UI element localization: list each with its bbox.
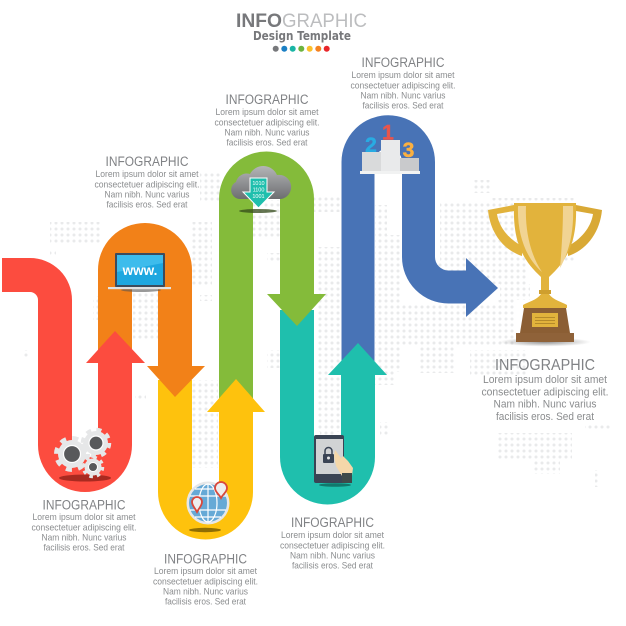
heading: INFOGRAPHIC — [106, 154, 189, 169]
body copy: consectetuer adipiscing elit. — [280, 539, 385, 550]
icon: cloud download: 1010 — [252, 181, 265, 187]
heading: INFOGRAPHIC — [495, 357, 595, 374]
body copy: Lorem ipsum dolor sit amet — [96, 168, 199, 179]
icon: cloud download — [231, 166, 291, 213]
heading: INFOGRAPHIC — [362, 55, 445, 70]
body copy: facilisis eros. Sed erat — [496, 411, 594, 423]
heading: INFOGRAPHIC — [291, 515, 374, 530]
body copy: Lorem ipsum dolor sit amet — [352, 69, 455, 80]
title word: INFO: INFO — [236, 10, 282, 32]
text block: step 6 — [350, 55, 456, 111]
icon: gears — [56, 430, 111, 482]
body copy — [280, 529, 385, 571]
body copy: facilisis eros. Sed erat — [292, 560, 373, 571]
body copy: Nam nibh. Nunc varius — [42, 532, 127, 542]
text block: step 4 — [214, 92, 320, 148]
body copy — [153, 565, 258, 607]
colour dots — [273, 46, 330, 52]
body copy: facilisis eros. Sed erat — [165, 596, 246, 607]
body copy — [350, 69, 456, 111]
ribbon step 6: blue — [358, 132, 498, 365]
icon: podium — [360, 122, 420, 174]
body copy: facilisis eros. Sed erat — [106, 199, 188, 210]
text block: step 2 — [94, 154, 200, 210]
body copy — [214, 106, 320, 148]
ribbon step 3: yellow — [175, 379, 265, 522]
body copy: Nam nibh. Nunc varius — [163, 586, 248, 596]
text block: step 5 — [280, 515, 385, 571]
subtitle: Design Template — [253, 28, 351, 43]
body copy: Lorem ipsum dolor sit amet — [32, 511, 136, 522]
body copy: Nam nibh. Nunc varius — [104, 188, 190, 200]
icon: podium: 2 — [365, 134, 377, 157]
body copy — [482, 374, 608, 423]
body copy: Nam nibh. Nunc varius — [494, 399, 597, 411]
body copy: Lorem ipsum dolor sit amet — [281, 529, 384, 540]
icon: podium: 1 — [382, 122, 394, 144]
icon: laptop — [108, 253, 171, 292]
body copy — [32, 511, 136, 553]
icon: podium: 3 — [403, 139, 414, 162]
body copy: Lorem ipsum dolor sit amet — [483, 374, 607, 386]
title word: GRAPHIC: GRAPHIC — [282, 10, 367, 32]
body copy: consectetuer adipiscing elit. — [94, 178, 200, 189]
ribbon step 4: green — [236, 168, 326, 400]
icon: globe with pins — [186, 482, 230, 532]
ribbon step 1: red — [2, 275, 145, 475]
text block: trophy result — [482, 357, 608, 423]
heading: INFOGRAPHIC — [42, 498, 126, 512]
body copy: consectetuer adipiscing elit. — [350, 79, 456, 90]
body copy: consectetuer adipiscing elit. — [32, 521, 136, 532]
ribbon step 5: teal — [297, 310, 387, 487]
body copy: facilisis eros. Sed erat — [44, 542, 125, 553]
body copy — [94, 168, 200, 210]
dotted world map background — [23, 173, 612, 487]
ribbon step 2: orange — [115, 240, 205, 397]
text block: step 1 — [32, 498, 136, 553]
body copy: consectetuer adipiscing elit. — [482, 386, 608, 398]
body copy: facilisis eros. Sed erat — [362, 100, 444, 111]
heading: INFOGRAPHIC — [226, 92, 309, 107]
body copy: Lorem ipsum dolor sit amet — [216, 106, 319, 117]
icon: cloud download: 1001 — [252, 194, 265, 200]
body copy: Nam nibh. Nunc varius — [224, 126, 310, 138]
icon: trophy — [488, 203, 602, 346]
body copy: Nam nibh. Nunc varius — [290, 550, 375, 560]
body copy: consectetuer adipiscing elit. — [214, 116, 320, 127]
title — [236, 10, 367, 52]
icon: tablet with lock and hand — [314, 435, 353, 487]
icon: cloud download: 1100 — [253, 188, 264, 194]
body copy: Nam nibh. Nunc varius — [360, 90, 446, 100]
body copy: consectetuer adipiscing elit. — [153, 575, 258, 586]
body copy: Lorem ipsum dolor sit amet — [154, 565, 257, 576]
text block: step 3 — [153, 552, 258, 607]
icon: laptop: www. — [122, 263, 157, 278]
body copy: facilisis eros. Sed erat — [226, 137, 308, 148]
heading: INFOGRAPHIC — [164, 552, 247, 566]
